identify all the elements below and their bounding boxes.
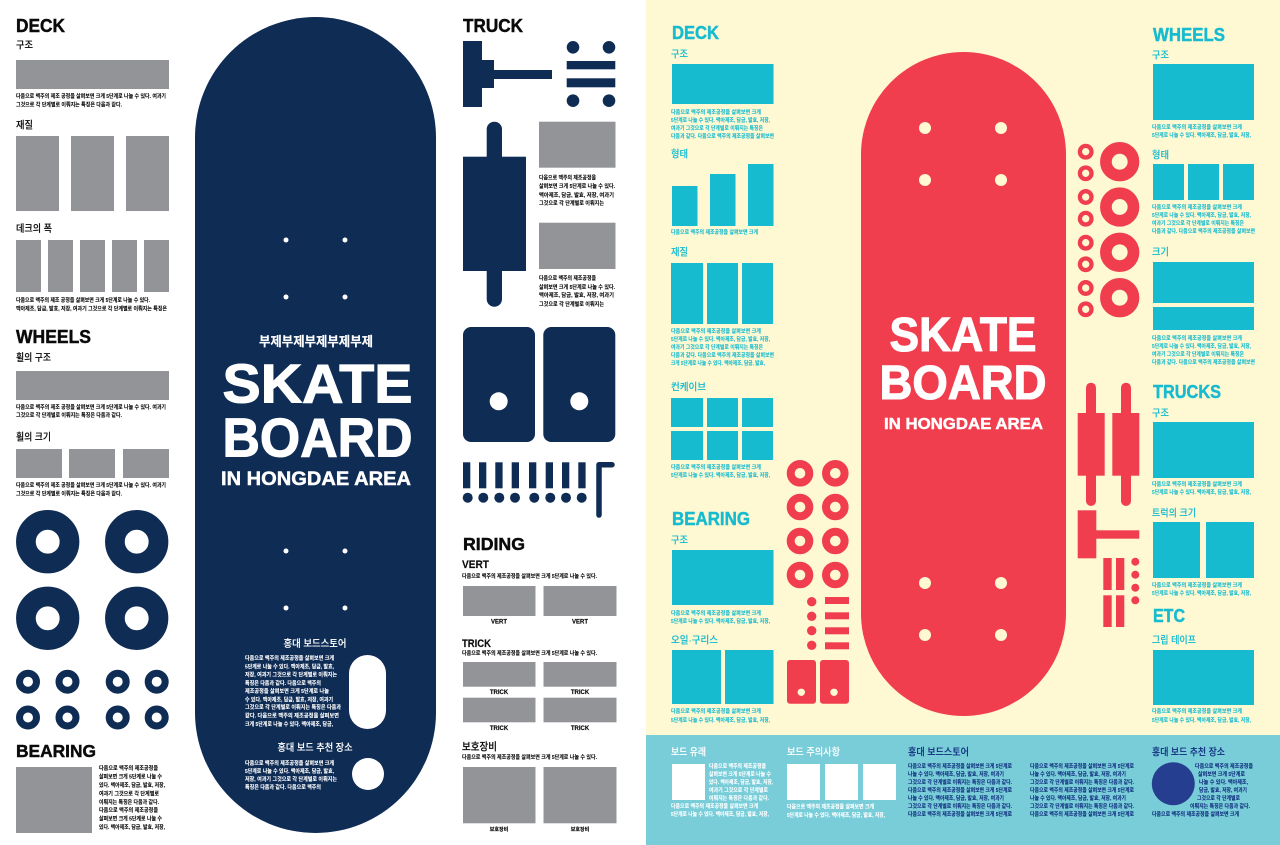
material label: 재질 xyxy=(671,246,688,258)
text: 5단계로 나눌 수 있다. 맥아제조, 담금, 발효, 저장, xyxy=(671,810,769,818)
heading: BEARING: BEARING xyxy=(16,741,96,761)
icon: truck side profile xyxy=(1078,510,1139,558)
truck text one: 그것으로 각 단계별로 이뤄지는 xyxy=(539,199,604,207)
title: in Hongdae area: IN HONGDAE AREA xyxy=(884,416,1043,433)
oil and grease label: 오일·구리스 xyxy=(671,634,718,646)
shape label: 형태 xyxy=(1152,150,1169,162)
text: 다음으로 맥주의 제조공정을 xyxy=(709,762,766,770)
icon: truck bolts and bars xyxy=(567,41,615,107)
panel: left deck section xyxy=(16,15,169,312)
structure text xyxy=(671,108,774,140)
shape text: 다음으로 맥주의 제조공정을 살펴보면 크게 xyxy=(671,228,758,236)
concave text: 다음으로 맥주의 제조공정을 살펴보면 크게 xyxy=(671,463,761,471)
store text column one: 그것으로 각 단계별로 이뤄지는 특징은 다음과 같다. xyxy=(908,778,1012,786)
structure label: 구조 xyxy=(671,536,688,546)
text: 있다. 맥아제조, 담금, 발효, 저장, xyxy=(709,778,773,786)
panel: right column etc xyxy=(1152,606,1254,724)
material text: 여과기 그것으로 각 단계별로 이뤄지는 특징은 xyxy=(671,343,763,351)
text xyxy=(787,802,885,819)
material text: 5단계로 나눌 수 있다. 맥아제조, 담금, 발효, 저장, xyxy=(671,335,770,343)
spot map circle xyxy=(352,758,384,790)
icon: red wheels column xyxy=(1080,146,1133,315)
size text: 5단계로 나눌 수 있다. 맥아제조, 담금, 발효, 저장, xyxy=(1152,342,1251,350)
grip tape image xyxy=(1153,650,1254,705)
shape label: 형태 xyxy=(671,148,688,160)
truck size label: 트럭의 크기 xyxy=(1152,508,1196,520)
material images xyxy=(671,263,773,324)
structure text: 5단계로 나눌 수 있다. 맥아제조, 담금, 발효, 저장, xyxy=(1152,131,1251,139)
truck text two: 살펴보면 크게 5단계로 나눌 수 있다. xyxy=(539,283,615,291)
shape text: 다음으로 맥주의 제조공정을 살펴보면 크게 xyxy=(1152,203,1242,211)
deck structure text xyxy=(16,92,166,108)
material text: 다음으로 맥주의 제조공정을 살펴보면 크게 xyxy=(671,327,761,335)
text: 살펴보면 크게 5단계로 나눌 수 xyxy=(709,770,771,778)
store text: 같다. 다음으로 맥주의 제조공정을 살펴보면 xyxy=(245,712,339,720)
heading: 보드 주의사항 xyxy=(787,746,840,758)
concave text xyxy=(671,463,770,479)
structure image xyxy=(672,64,774,104)
grip tape text: 다음으로 맥주의 제조공정을 살펴보면 크게 xyxy=(1152,707,1242,715)
panel: riding section xyxy=(462,534,616,833)
vert captions xyxy=(491,619,588,625)
protective gear captions: 보호장비 xyxy=(571,826,590,833)
truck size images xyxy=(1153,522,1254,578)
structure label: 구조 xyxy=(671,50,688,60)
truck text one: 맥아제조, 담금, 발효, 저장, 여과기 xyxy=(539,191,614,199)
icon: red trucks xyxy=(1078,383,1139,627)
heading: DECK: DECK xyxy=(16,15,66,36)
deck bolt holes xyxy=(284,238,348,610)
bearing text: 이뤄지는 특징은 다음과 같다. xyxy=(99,798,159,806)
icon: truck side profile xyxy=(463,41,552,107)
subtitle: 부제부제부제부제부제 xyxy=(259,334,373,349)
vert images xyxy=(463,586,616,616)
size label: 크기 xyxy=(1152,246,1169,258)
shape text: 다음과 같다. 다음으로 맥주의 제조공정을 살펴보면 xyxy=(1152,227,1255,235)
structure text: 다음으로 맥주의 제조공정을 살펴보면 크게 xyxy=(671,609,761,617)
store text: 크게 5단계로 나눌 수 있다. 맥아제조, 담금, xyxy=(245,720,333,728)
truck text one: 살펴보면 크게 5단계로 나눌 수 있다. xyxy=(539,182,615,190)
title: SKATE BOARD: SKATE xyxy=(890,309,1036,362)
truck image one xyxy=(539,122,616,168)
heading: ETC: ETC xyxy=(1153,606,1185,626)
shape bars xyxy=(672,164,774,226)
panel: right column wheels xyxy=(1152,25,1255,366)
shape text xyxy=(1152,203,1255,235)
spot text: 특징은 다음과 같다. 다음으로 맥주의 xyxy=(245,783,321,791)
store text column one: 그것으로 각 단계별로 이뤄지는 특징은 다음과 같다. xyxy=(908,802,1012,810)
panel: board history xyxy=(671,746,773,818)
structure text: 다음으로 맥주의 제조공정을 살펴보면 크게 xyxy=(1152,123,1242,131)
heading: 보드 유래 xyxy=(671,746,706,758)
store text: 특징은 다음과 같다. 다음으로 맥주의 xyxy=(245,679,321,687)
text: 여과기 그것으로 각 단계별로 xyxy=(709,786,768,794)
trick images xyxy=(463,662,616,722)
deck width text: 다음으로 맥주의 제조 공정을 살펴보면 크게 5단계로 나눌 수 있다. xyxy=(16,296,150,304)
deck width label: 데크의 폭 xyxy=(16,223,52,235)
text wrapping the circle: 담금, 발효, 저장, 여과기 xyxy=(1199,786,1247,794)
protective gear images xyxy=(463,767,616,823)
bearing text xyxy=(99,764,165,831)
navy skateboard deck xyxy=(195,17,436,833)
vert captions: VERT xyxy=(572,619,588,625)
structure text: 여과기 그것으로 각 단계별로 이뤄지는 특징은 xyxy=(671,124,763,132)
panel: left bearing section xyxy=(16,741,165,833)
structure text: 다음으로 맥주의 제조공정을 살펴보면 크게 xyxy=(671,108,761,116)
wheel size images xyxy=(16,449,169,478)
protective gear captions: 보호장비 xyxy=(490,826,509,833)
truck text two: 다음으로 맥주의 제조공정을 xyxy=(539,274,596,282)
truck text two: 그것으로 각 단계별로 이뤄지는 xyxy=(539,300,604,308)
wheel structure image xyxy=(16,371,169,400)
bearing image xyxy=(16,767,92,833)
store text column one: 나눌 수 있다. 맥아제조, 담금, 발효, 저장, 여과기 xyxy=(908,770,1004,778)
store text column two: 그것으로 각 단계별로 이뤄지는 특징은 다음과 같다. xyxy=(1030,778,1134,786)
icon: bars and dots xyxy=(1103,558,1139,627)
deck structure text: 다음으로 맥주의 제조 공정을 살펴보면 크게 5단계로 나눌 수 있다. 여과기 xyxy=(16,92,166,100)
panel: left wheels section xyxy=(16,326,169,726)
size text: 다음과 같다. 다음으로 맥주의 제조공정을 살펴보면 xyxy=(1152,358,1255,366)
deck width text xyxy=(16,296,167,312)
deck material images xyxy=(16,136,169,211)
store text: 그것으로 각 단계별로 이뤄지는 특징은 다음과 xyxy=(245,703,342,711)
icon: red bearings xyxy=(787,464,849,704)
heading: TRUCK: TRUCK xyxy=(463,15,524,36)
material text xyxy=(671,327,774,367)
deck width images xyxy=(16,240,169,292)
icon: dots and spacers xyxy=(807,597,849,650)
heading: 홍대 보드스토어 xyxy=(908,746,969,758)
wheel structure text: 다음으로 맥주의 제조 공정을 살펴보면 크게 5단계로 나눌 수 있다. 여과기 xyxy=(16,403,166,411)
heading: BEARING: BEARING xyxy=(672,509,750,529)
red skateboard deck xyxy=(861,52,1066,716)
heading: DECK: DECK xyxy=(672,23,719,43)
heading: WHEELS: WHEELS xyxy=(16,326,91,347)
store text column one: 나눌 수 있다. 맥아제조, 담금, 발효, 저장, 여과기 xyxy=(908,794,1004,802)
text wrapping the circle: 다음으로 맥주의 제조공정을 xyxy=(1195,762,1253,770)
grip tape label: 그립 테이프 xyxy=(1152,634,1196,646)
title: in Hongdae area: IN HONGDAE AREA xyxy=(221,469,411,490)
structure image xyxy=(1153,64,1254,120)
wheel structure text: 그것으로 각 단계별로 이뤄지는 특징은 다음과 같다. xyxy=(16,411,122,419)
wheel size label: 휠의 크기 xyxy=(16,430,51,444)
wheel size text: 다음으로 맥주의 제조 공정을 살펴보면 크게 5단계로 나눌 수 있다. 여과기 xyxy=(16,481,166,489)
bearing text: 여과기 그것으로 각 단계별로 xyxy=(99,790,159,798)
store text: 5단계로 나눌 수 있다. 맥아제조, 담금, 발효, xyxy=(245,662,334,670)
spot text: 저장, 여과기 그것으로 각 단계별로 이뤄지는 xyxy=(245,775,337,783)
vert text: 다음으로 맥주의 제조공정을 살펴보면 크게 5단계로 나눌 수 있다. xyxy=(462,572,597,580)
trick captions xyxy=(490,690,590,732)
spot text: 5단계로 나눌 수 있다. 맥아제조, 담금, 발효, xyxy=(245,767,334,775)
size text xyxy=(1152,334,1255,366)
protective gear heading: 보호장비 xyxy=(462,741,497,753)
structure text: 다음과 같다. 다음으로 맥주의 제조공정을 살펴보면 xyxy=(671,132,774,140)
deck structure image xyxy=(16,60,169,89)
text xyxy=(671,762,773,818)
text: 이뤄지는 특징은 다음과 같다. xyxy=(709,794,769,802)
truck size text xyxy=(1152,581,1251,597)
trick heading: TRICK xyxy=(462,638,491,650)
deck bolt holes xyxy=(919,122,1007,641)
bearing text: 있다. 맥아제조, 담금, 발효, 저장, xyxy=(99,781,165,789)
shape text: 여과기 그것으로 각 단계별로 이뤄지는 특징은 xyxy=(1152,219,1244,227)
heading: RIDING: RIDING xyxy=(463,534,525,554)
oil and grease text xyxy=(671,707,770,724)
text: 다음으로 맥주의 제조공정을 살펴보면 크게 xyxy=(671,802,758,810)
deck structure label: 구조 xyxy=(16,40,33,52)
panel: right column deck xyxy=(671,23,774,479)
protective gear text: 다음으로 맥주의 제조공정을 살펴보면 크게 5단계로 나눌 수 있다. xyxy=(462,753,597,761)
truck size text: 5단계로 나눌 수 있다. 맥아제조, 담금, 발효, 저장, xyxy=(1152,589,1251,597)
store text column two: 나눌 수 있다. 맥아제조, 담금, 발효, 저장, 여과기 xyxy=(1030,794,1126,802)
icon: riser pads xyxy=(787,660,849,704)
store text: 다음으로 맥주의 제조공정을 살펴보면 크게 xyxy=(245,654,334,662)
store text column one: 다음으로 맥주의 제조공정을 살펴보면 크게 5단계로 xyxy=(908,762,1012,770)
store text column one: 다음으로 맥주의 제조공정을 살펴보면 크게 5단계로 xyxy=(908,786,1012,794)
icon: small bearing rings xyxy=(20,673,165,726)
store text: 제조공정을 살펴보면 크게 5단계로 나눌 xyxy=(245,687,329,695)
oil and grease text: 다음으로 맥주의 제조공정을 살펴보면 크게 xyxy=(671,707,761,715)
trick captions: TRICK xyxy=(490,726,509,732)
text: 다음으로 맥주의 제조공정을 살펴보면 크게 xyxy=(787,802,874,810)
panel: Hongdae board store xyxy=(908,746,1134,818)
concave images xyxy=(671,398,773,460)
store text column one xyxy=(908,762,1012,818)
bearing text: 다음으로 맥주의 제조공정을 xyxy=(99,806,158,814)
bearing text: 있다. 맥아제조, 담금, 발효, 저장, xyxy=(99,823,165,831)
shape text: 5단계로 나눌 수 있다. 맥아제조, 담금, 발효, 저장, xyxy=(1152,211,1251,219)
panel: right column trucks xyxy=(1152,382,1254,597)
store text column two: 다음으로 맥주의 제조공정을 살펴보면 크게 5단계로 xyxy=(1030,810,1134,818)
trick captions: TRICK xyxy=(571,690,590,696)
oil and grease text: 5단계로 나눌 수 있다. 맥아제조, 담금, 발효, 저장, xyxy=(671,716,770,724)
title: SKATE BOARD: BOARD xyxy=(222,406,412,468)
text wrapping the circle xyxy=(1152,762,1253,818)
spot heading: 홍대 보드 추천 장소 xyxy=(278,741,352,754)
heading: WHEELS: WHEELS xyxy=(1153,25,1225,45)
panel: Hongdae recommended spots xyxy=(1152,746,1253,818)
icon: hex wrench xyxy=(599,465,612,515)
trick text: 다음으로 맥주의 제조공정을 살펴보면 크게 5단계로 나눌 수 있다. xyxy=(462,649,597,657)
text wrapping the circle: 다음으로 맥주의 제조공정을 살펴보면 크게 xyxy=(1152,810,1239,818)
grip tape text xyxy=(1152,707,1251,724)
store text column one: 다음으로 맥주의 제조공정을 살펴보면 크게 5단계로 xyxy=(908,810,1012,818)
structure text: 다음으로 맥주의 제조공정을 살펴보면 크게 xyxy=(1152,480,1242,488)
bearing text: 살펴보면 크게 5단계로 나눌 수 xyxy=(99,814,162,822)
icon: truck top view xyxy=(463,122,526,307)
structure text xyxy=(1152,123,1251,139)
deck material label: 재질 xyxy=(16,120,33,132)
oil and grease images xyxy=(672,650,774,704)
store heading: 홍대 보드스토어 xyxy=(284,637,346,650)
grip tape text: 5단계로 나눌 수 있다. 맥아제조, 담금, 발효, 저장, xyxy=(1152,716,1251,724)
shape images xyxy=(1153,164,1254,200)
deck width text: 맥아제조, 담금, 발효, 저장, 여과기 그것으로 각 단계별로 이뤄지는 특징은 xyxy=(16,304,167,312)
truck image two xyxy=(539,223,616,269)
deck structure text: 그것으로 각 단계별로 이뤄지는 특징은 다음과 같다. xyxy=(16,100,122,108)
store map slot xyxy=(349,655,386,729)
wheel structure text xyxy=(16,403,166,419)
map circle xyxy=(1152,762,1195,805)
material text: 다음과 같다. 다음으로 맥주의 제조공정을 살펴보면 xyxy=(671,351,774,359)
truck text two: 맥아제조, 담금, 발효, 저장, 여과기 xyxy=(539,291,614,299)
text wrapping the circle: 살펴보면 크게 5단계로 xyxy=(1198,770,1245,778)
title: SKATE BOARD xyxy=(880,309,1046,410)
truck text two xyxy=(539,274,615,308)
icon: riser pads xyxy=(463,327,615,442)
panel: board cautions xyxy=(787,746,896,819)
store text: 수 있다. 맥아제조, 담금, 발효, 저장, 여과기 xyxy=(245,696,333,704)
title: SKATE BOARD xyxy=(222,352,412,468)
wheel size text xyxy=(16,481,166,498)
title: SKATE BOARD: SKATE xyxy=(222,352,412,414)
structure text xyxy=(671,609,770,625)
trick captions: TRICK xyxy=(571,726,590,732)
spot text xyxy=(245,759,337,791)
size text: 다음으로 맥주의 제조공정을 살펴보면 크게 xyxy=(1152,334,1242,342)
structure text: 5단계로 나눌 수 있다. 맥아제조, 담금, 발효, 저장, xyxy=(671,617,770,625)
size text: 여과기 그것으로 각 단계별로 이뤄지는 특징은 xyxy=(1152,350,1244,358)
structure label: 구조 xyxy=(1152,50,1169,62)
store text column two: 다음으로 맥주의 제조공정을 살펴보면 크게 5단계로 xyxy=(1030,786,1134,794)
store text xyxy=(245,654,342,728)
structure text xyxy=(1152,480,1251,496)
panel: right column bearing xyxy=(671,509,774,724)
structure text: 5단계로 나눌 수 있다. 맥아제조, 담금, 발효, 저장, xyxy=(671,116,770,124)
structure image xyxy=(1153,422,1254,478)
concave label: 컨케이브 xyxy=(671,382,706,394)
icon: bolts and nuts xyxy=(463,462,587,503)
wheel size text: 그것으로 각 단계별로 이뤄지는 특징은 다음과 같다. xyxy=(16,490,122,498)
vert captions: VERT xyxy=(491,619,507,625)
wheel structure label: 휠의 구조 xyxy=(16,351,51,364)
protective gear captions xyxy=(490,826,590,833)
text: 5단계로 나눌 수 있다. 맥아제조, 담금, 발효, 저장, xyxy=(787,811,885,819)
store text column two: 나눌 수 있다. 맥아제조, 담금, 발효, 저장, 여과기 xyxy=(1030,770,1126,778)
store text column two: 그것으로 각 단계별로 이뤄지는 특징은 다음과 같다. xyxy=(1030,802,1134,810)
heading: TRUCKS: TRUCKS xyxy=(1153,382,1221,402)
store text column two: 다음으로 맥주의 제조공정을 살펴보면 크게 5단계로 xyxy=(1030,762,1134,770)
bearing text: 다음으로 맥주의 제조공정을 xyxy=(99,764,158,772)
vert heading: VERT xyxy=(462,559,489,571)
truck text one xyxy=(539,174,615,207)
spot text: 다음으로 맥주의 제조공정을 살펴보면 크게 xyxy=(245,759,334,767)
title: SKATE BOARD: BOARD xyxy=(880,357,1046,410)
concave text: 5단계로 나눌 수 있다. 맥아제조, 담금, 발효, 저장, xyxy=(671,471,770,479)
icon: large wheels xyxy=(26,520,159,640)
structure image xyxy=(672,550,774,605)
heading: 홍대 보드 추천 장소 xyxy=(1152,746,1225,758)
truck size text: 다음으로 맥주의 제조공정을 살펴보면 크게 xyxy=(1152,581,1242,589)
structure text: 5단계로 나눌 수 있다. 맥아제조, 담금, 발효, 저장, xyxy=(1152,488,1251,496)
panel: truck section xyxy=(463,15,616,515)
text wrapping the circle: 이뤄지는 특징은 다음과 같다. xyxy=(1190,802,1250,810)
images xyxy=(787,764,896,800)
trick captions: TRICK xyxy=(490,690,509,696)
store text column two xyxy=(1030,762,1134,818)
bearing text: 살펴보면 크게 5단계로 나눌 수 xyxy=(99,772,162,780)
store text: 저장, 여과기 그것으로 각 단계별로 이뤄지는 xyxy=(245,670,337,678)
text wrapping the circle: 그것으로 각 단계별로 xyxy=(1197,794,1240,802)
structure label: 구조 xyxy=(1152,408,1169,420)
material text: 크게 5단계로 나눌 수 있다. 맥아제조, 담금, 발효, xyxy=(671,359,765,367)
image xyxy=(672,764,705,800)
truck text one: 다음으로 맥주의 제조공정을 xyxy=(539,174,596,182)
text wrapping the circle: 나눌 수 있다. 맥아제조, xyxy=(1199,778,1248,786)
size images xyxy=(1153,262,1254,330)
